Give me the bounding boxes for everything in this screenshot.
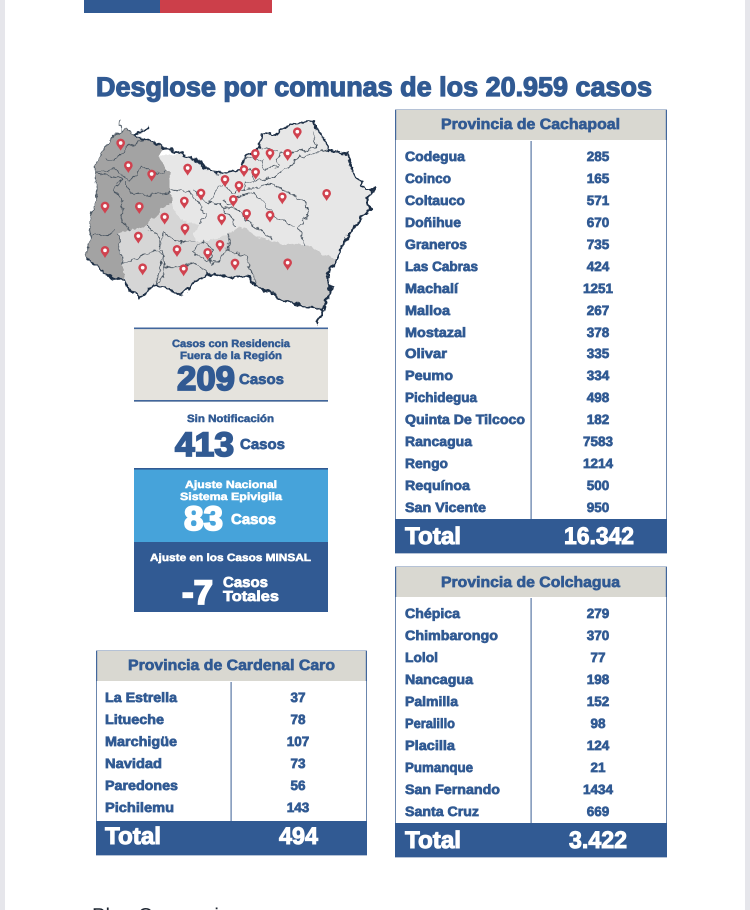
commune names: Litueche (105, 712, 165, 727)
commune names: Mostazal (405, 325, 466, 340)
panel: ajuste nacional: Ajuste Nacional (185, 479, 277, 491)
panel: ajuste minsal: -7 (182, 574, 213, 612)
commune values: 335 (587, 346, 610, 361)
total row (395, 823, 667, 857)
table heading (395, 110, 667, 140)
panel: residencia fuera de la region: 209 (177, 360, 235, 398)
title: Desglose por comunas de los 20.959 casos (96, 72, 652, 102)
commune names (405, 149, 525, 515)
panel: ajuste nacional: Sistema Epivigila (180, 491, 282, 503)
commune names: Santa Cruz (405, 804, 479, 819)
commune names: Rengo (405, 456, 448, 471)
commune values: 267 (587, 303, 609, 318)
total row (395, 519, 667, 553)
panel: ajuste minsal: Ajuste en los Casos MINSAL (150, 552, 312, 564)
commune values: 21 (590, 760, 606, 775)
table heading: Provincia de Cardenal Caro (128, 657, 335, 674)
panel: ajuste nacional: 83 (184, 500, 223, 538)
table heading: Provincia de Colchagua (441, 574, 621, 591)
commune names: Navidad (105, 756, 162, 771)
commune values: 165 (587, 171, 610, 186)
commune names: Requínoa (405, 478, 471, 493)
commune names: Chimbarongo (405, 628, 498, 643)
total row: 16.342 (564, 523, 634, 550)
total row: Total (405, 523, 461, 550)
commune values (287, 690, 310, 815)
total row: Total (405, 827, 461, 854)
commune values: 73 (290, 756, 306, 771)
panel: sin notificacion: Casos (240, 437, 285, 453)
commune values: 669 (587, 804, 609, 819)
commune values: 285 (587, 149, 610, 164)
commune values: 1251 (583, 281, 614, 296)
commune values: 78 (290, 712, 306, 727)
commune names: Las Cabras (405, 259, 478, 274)
commune names: Paredones (105, 778, 178, 793)
commune names: Coltauco (405, 193, 465, 208)
commune values: 37 (290, 690, 306, 705)
commune names: Pichidegua (405, 390, 477, 405)
commune values: 77 (590, 650, 606, 665)
table heading (395, 567, 667, 597)
commune values: 107 (287, 734, 309, 749)
panel: sin notificacion (175, 413, 285, 464)
commune names: Peralillo (405, 716, 455, 731)
commune values: 334 (587, 368, 610, 383)
province: Colchagua (118, 203, 337, 310)
commune names: Quinta De Tilcoco (405, 412, 525, 427)
table heading (96, 651, 367, 681)
panel: ajuste minsal: Casos (223, 575, 268, 591)
commune values: 143 (287, 800, 310, 815)
panel: sin notificacion: 413 (175, 426, 234, 464)
commune names: Coinco (405, 171, 451, 186)
table: Provincia de Cachapoal (395, 110, 667, 553)
commune values (583, 149, 614, 515)
header flag bar (84, 0, 272, 13)
commune names: Rancagua (405, 434, 472, 449)
commune names: Chépica (405, 606, 460, 621)
commune values: 7583 (583, 434, 614, 449)
commune names: Pichilemu (105, 800, 174, 815)
commune names: Graneros (405, 237, 467, 252)
commune values: 56 (290, 778, 306, 793)
commune names: Doñihue (405, 215, 462, 230)
commune values: 735 (587, 237, 610, 252)
commune values: 370 (587, 628, 609, 643)
commune values: 198 (587, 672, 610, 687)
province: Cardenal Caro (87, 130, 171, 280)
commune values: 279 (587, 606, 609, 621)
commune values: 424 (587, 259, 610, 274)
total row (96, 821, 367, 855)
commune values: 571 (587, 193, 610, 208)
table: Provincia de Colchagua (395, 567, 667, 857)
commune names: Pumanque (405, 760, 473, 775)
commune values: 182 (587, 412, 609, 427)
panel: residencia fuera de la region: Casos (239, 372, 284, 388)
inner commune borders (92, 130, 328, 285)
commune names: Palmilla (405, 694, 459, 709)
commune values: 498 (587, 390, 610, 405)
panel: ajuste minsal (134, 542, 328, 612)
commune values: 670 (587, 215, 609, 230)
total row: 3.422 (569, 827, 627, 854)
commune names: Placilla (405, 738, 456, 753)
east Colchagua darker commune (228, 227, 337, 310)
commune values: 1434 (583, 782, 614, 797)
commune names (105, 690, 178, 815)
commune names: Malloa (405, 303, 451, 318)
commune values: 500 (587, 478, 609, 493)
commune names (405, 606, 500, 819)
commune names: Machalí (405, 281, 459, 296)
total row: Total (105, 823, 161, 850)
map pins (101, 127, 331, 276)
panel: ajuste minsal: Totales (223, 589, 279, 605)
commune names: Peumo (405, 368, 453, 383)
outer region border (87, 120, 375, 323)
table: Provincia de Cardenal Caro (96, 651, 367, 855)
panel: ajuste nacional (134, 468, 328, 542)
commune names: La Estrella (105, 690, 178, 705)
panel: sin notificacion: Sin Notificación (187, 413, 274, 425)
commune values: 950 (587, 500, 609, 515)
commune names: Nancagua (405, 672, 474, 687)
commune values: 152 (587, 694, 609, 709)
map of the region (87, 120, 375, 323)
commune values: 98 (590, 716, 606, 731)
commune values: 378 (587, 325, 610, 340)
commune names: Marchigüe (105, 734, 178, 749)
table heading: Provincia de Cachapoal (441, 116, 620, 133)
commune names: San Fernando (405, 782, 500, 797)
panel: ajuste nacional: Casos (231, 512, 276, 528)
panel: residencia fuera de la region: Fuera de la Región (180, 350, 282, 362)
commune values (583, 606, 614, 819)
commune values: 1214 (583, 456, 614, 471)
panel: residencia fuera de la region (134, 328, 328, 402)
commune names: Lolol (405, 650, 438, 665)
total row: 494 (279, 823, 319, 850)
province: Cachapoal (158, 122, 375, 260)
map regions and borders (87, 120, 375, 323)
commune names: San Vicente (405, 500, 487, 515)
panel: residencia fuera de la region: Casos con Residencia (172, 338, 290, 350)
commune values: 124 (587, 738, 610, 753)
commune names: Codegua (405, 149, 465, 164)
commune names: Olivar (405, 346, 448, 361)
